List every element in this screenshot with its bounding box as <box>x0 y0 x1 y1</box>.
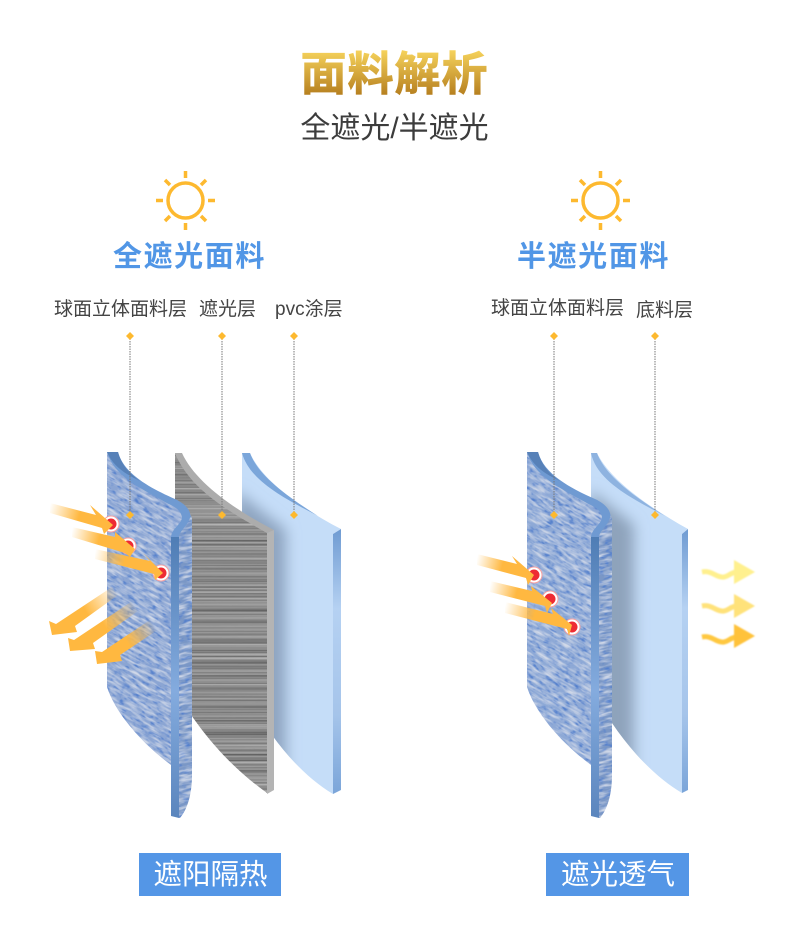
hot spots right <box>526 567 580 635</box>
callout: shade and heat insulation <box>139 853 281 896</box>
panel: spherical fabric sheet left <box>107 452 192 818</box>
icon: sun right <box>571 171 630 230</box>
callout: shade and breathable <box>546 853 689 896</box>
subtitle: 全遮光/半遮光 <box>300 112 489 145</box>
callout: shade and breathable: 遮光透气 <box>561 859 675 891</box>
panel: pvc coating sheet left <box>242 453 341 794</box>
icon: sun left <box>156 171 215 230</box>
panel: base fabric sheet right <box>591 453 688 793</box>
label: blackout layer: 遮光层 <box>199 298 256 320</box>
callout: shade and heat insulation: 遮阳隔热 <box>153 859 268 891</box>
leader lines right <box>550 332 659 519</box>
arrows: reflected sunlight left <box>49 587 156 664</box>
label: base fabric layer: 底料层 <box>636 299 693 321</box>
title: 面料解析 <box>300 48 488 100</box>
label: spherical fabric layer right: 球面立体面料层 <box>491 297 624 319</box>
arrows: incoming sunlight right <box>477 554 580 636</box>
heading: semi blackout fabric: 半遮光面料 <box>517 240 670 273</box>
panel: blackout layer sheet <box>170 450 274 800</box>
arrows: incoming sunlight left <box>50 503 169 581</box>
label: pvc coating: pvc涂层 <box>275 298 343 320</box>
leader lines left <box>126 332 298 519</box>
panel: spherical fabric sheet right <box>527 452 612 818</box>
label: spherical fabric layer left: 球面立体面料层 <box>54 298 187 320</box>
arrows: transmitted air right <box>702 560 755 648</box>
hot spots left <box>103 516 169 581</box>
heading: full blackout fabric: 全遮光面料 <box>113 240 266 273</box>
